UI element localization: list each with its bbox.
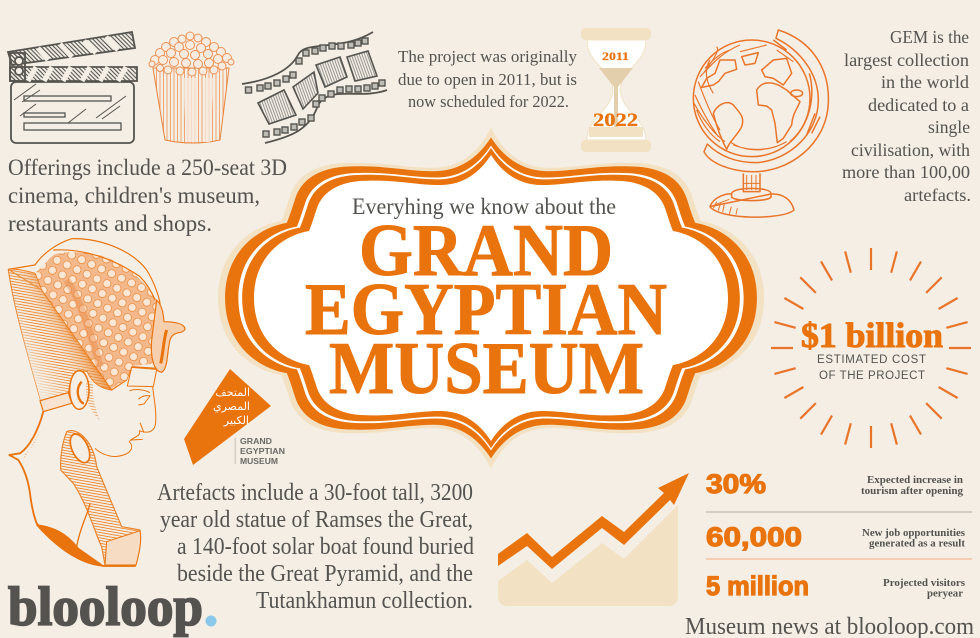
title: EGYPTIAN xyxy=(305,269,667,351)
callout: project cost: OF THE PROJECT xyxy=(819,370,925,382)
text: GEM collection: largest collection xyxy=(844,50,969,70)
text: artefacts xyxy=(157,480,474,614)
icon: hourglass: 2011 xyxy=(602,49,629,63)
stat: 5 million visitors: Projected visitors xyxy=(883,577,966,589)
logo: blooloop: blooloop xyxy=(8,576,203,637)
ear xyxy=(70,371,89,409)
text: project timing xyxy=(398,47,577,111)
icon: film strip xyxy=(242,32,387,143)
text: GEM collection: artefacts. xyxy=(904,185,971,205)
icon: clapperboard xyxy=(8,32,137,143)
beard xyxy=(61,431,141,565)
icon: hourglass xyxy=(581,28,651,152)
stat: 5 million visitors: peryear xyxy=(927,588,963,600)
text: GEM collection: single xyxy=(928,117,970,137)
crown dotted cap xyxy=(35,252,157,388)
crown hatched back panel xyxy=(8,269,112,401)
text: GEM collection: dedicated to a xyxy=(868,95,969,115)
logo: Grand Egyptian Museum xyxy=(184,369,285,466)
stat: 60,000 jobs: 60,000 xyxy=(706,522,802,552)
shoulder outline xyxy=(9,412,140,566)
logo: Grand Egyptian Museum: المصري xyxy=(213,400,250,413)
callout: project cost: $1 billion xyxy=(801,316,943,355)
stat: 30 percent: 30% xyxy=(706,469,766,499)
callout: project cost xyxy=(801,316,943,382)
stat: 5 million visitors xyxy=(706,571,966,601)
icon: globe xyxy=(693,30,828,217)
icon: cost sunburst xyxy=(771,248,971,448)
chart: rising arrow xyxy=(498,473,689,606)
chest shadow xyxy=(37,525,103,566)
stat: 30 percent: tourism after opening xyxy=(861,485,963,497)
crown outline xyxy=(8,239,160,390)
logo: Grand Egyptian Museum: المتحف xyxy=(215,386,250,399)
text: artefacts: beside the Great Pyramid, and the xyxy=(177,561,473,587)
text: offerings xyxy=(8,155,287,237)
face shadow xyxy=(86,380,100,420)
text: artefacts: Artefacts include a 30-foot tall, 3200 xyxy=(157,480,473,506)
text: artefacts: a 140-foot solar boat found buried xyxy=(177,534,474,560)
text: offerings: cinema, children's museum, xyxy=(8,183,260,209)
stat: 60,000 jobs: generated as a result xyxy=(869,538,965,550)
text: GEM collection: more than 100,00 xyxy=(842,162,970,182)
stat: 60,000 jobs xyxy=(706,522,966,552)
icon: hourglass: 2022 xyxy=(593,110,638,131)
logo: Grand Egyptian Museum: MUSEUM xyxy=(240,457,278,466)
text: project timing: The project was originally xyxy=(398,47,577,66)
title xyxy=(305,210,667,410)
stat: 30 percent xyxy=(706,469,963,499)
logo: Grand Egyptian Museum: GRAND xyxy=(240,437,272,446)
logo: Grand Egyptian Museum: EGYPTIAN xyxy=(240,447,285,456)
panel: title plaque xyxy=(218,128,764,468)
illustration: Ramses statue head xyxy=(8,239,185,566)
text: offerings: restaurants and shops. xyxy=(8,211,212,237)
stat: 30 percent: Expected increase in xyxy=(867,474,963,486)
text: project timing: now scheduled for 2022. xyxy=(408,92,569,111)
face profile xyxy=(95,387,156,457)
icon: popcorn bucket xyxy=(149,32,234,143)
text: GEM collection: GEM is the xyxy=(890,27,969,47)
text: GEM collection: in the world xyxy=(881,72,969,92)
title: GRAND xyxy=(359,210,613,292)
logo: Grand Egyptian Museum: الكبير xyxy=(223,414,249,427)
text: GEM collection xyxy=(842,27,971,205)
text: GEM collection: civilisation, with xyxy=(851,140,970,160)
stat: 5 million visitors: 5 million xyxy=(706,571,809,601)
subtitle: Everyhing we know about the xyxy=(352,194,616,219)
callout: project cost: ESTIMATED COST xyxy=(817,354,926,366)
stat: 60,000 jobs: New job opportunities xyxy=(862,527,966,539)
uraeus xyxy=(151,300,185,372)
title: MUSEUM xyxy=(329,328,644,410)
text: artefacts: year old statue of Ramses the Great, xyxy=(160,507,473,533)
text: artefacts: Tutankhamun collection. xyxy=(256,588,473,614)
text: project timing: due to open in 2011, but is xyxy=(398,70,577,89)
text: offerings: Offerings include a 250-seat 3D xyxy=(8,155,287,181)
